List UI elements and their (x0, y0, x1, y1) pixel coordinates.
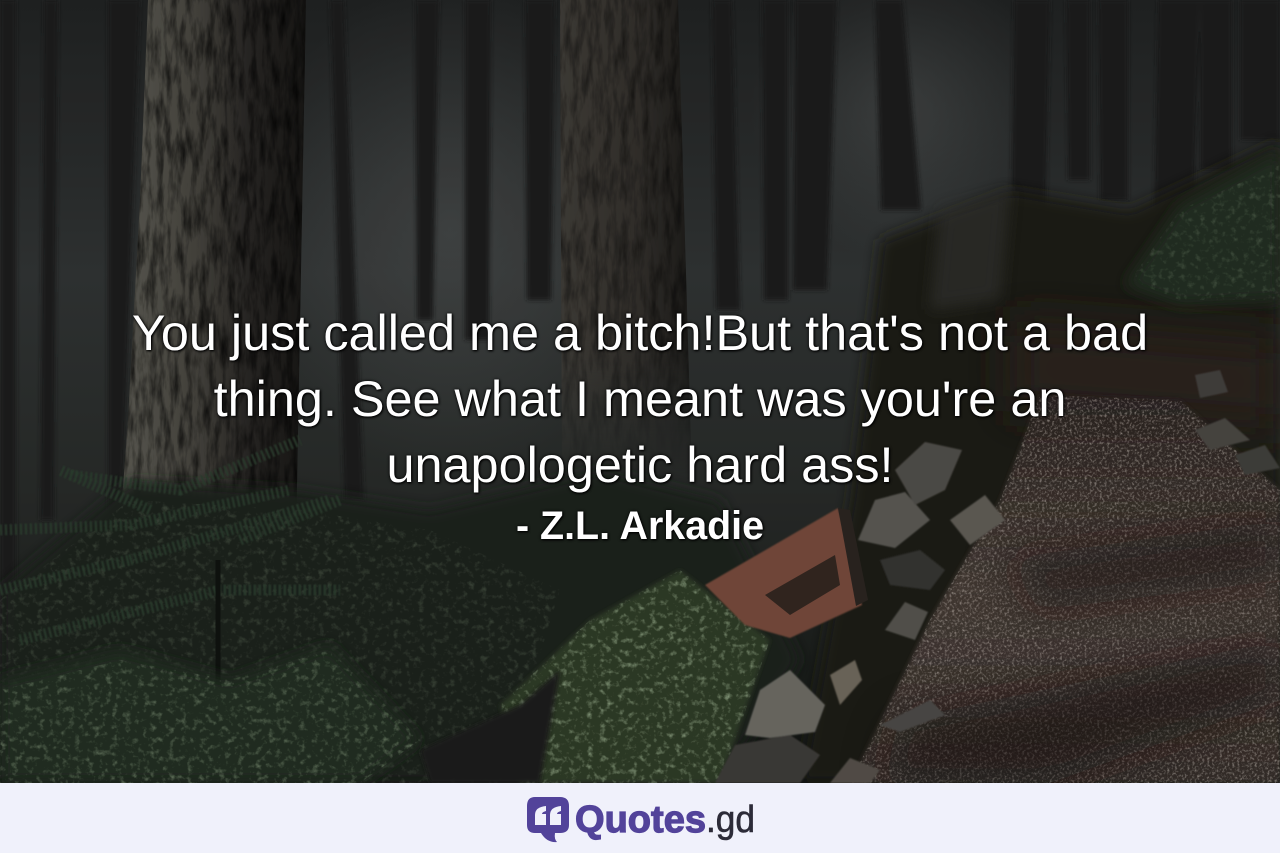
right hillside (800, 140, 1280, 783)
main trunks (123, 0, 690, 494)
forest floor undergrowth (0, 470, 800, 783)
conifer branches (0, 440, 340, 640)
footer bar (0, 783, 1280, 853)
wordmark: Quotes (575, 799, 706, 841)
ferns (0, 645, 420, 783)
rocks (715, 370, 1280, 783)
logo: Quotes.gd: .gd (706, 799, 755, 841)
quote text (132, 304, 1148, 494)
icon: speech bubble with quotation marks (527, 797, 569, 842)
dirt trail (850, 395, 1280, 783)
distant trees (0, 0, 1280, 640)
text: unapologetic hard ass! (386, 436, 894, 493)
logo: Quotes.gd (527, 797, 755, 842)
text: thing. See what I meant was you're an (214, 370, 1066, 427)
text: You just called me a bitch!But that's not a bad (132, 304, 1148, 361)
author attribution: - Z.L. Arkadie (516, 504, 764, 548)
fallen log (705, 508, 862, 638)
